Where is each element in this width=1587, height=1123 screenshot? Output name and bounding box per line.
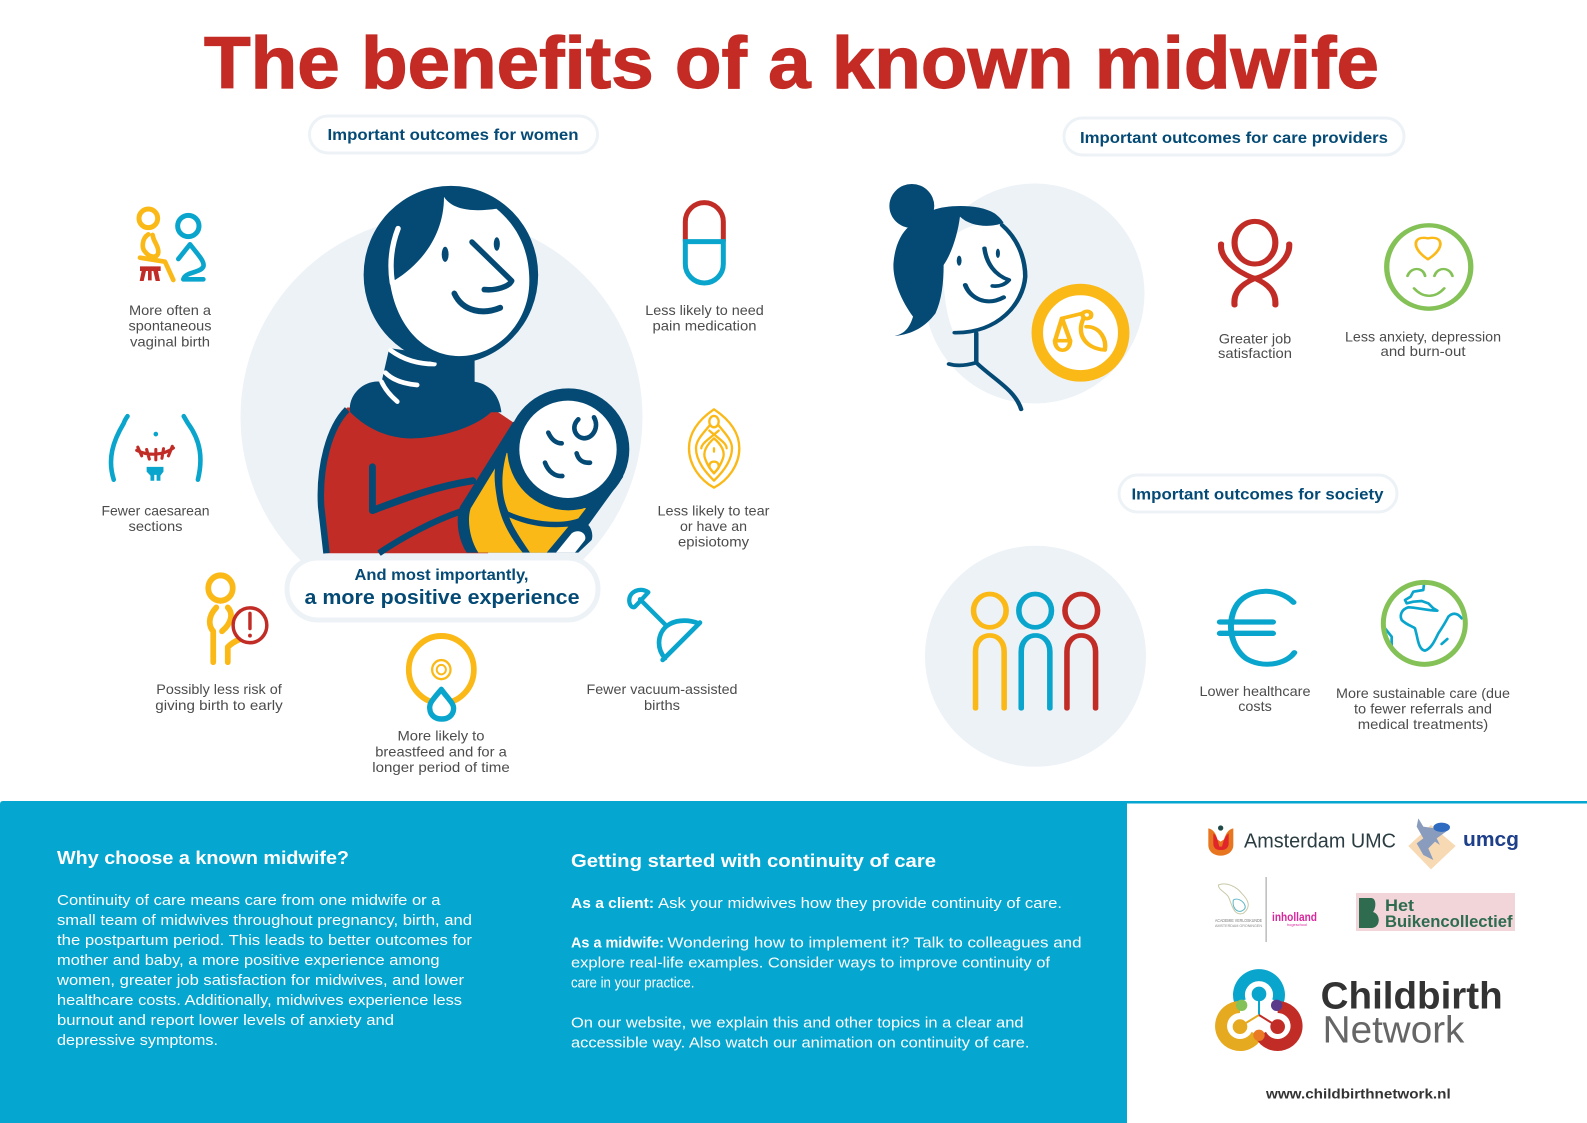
label: spontaneous vaginal birth [128, 303, 212, 350]
label: anxiety and burn-out [1345, 330, 1501, 359]
illustration: baby [458, 388, 629, 553]
label: breastfeeding: longer period of time [372, 760, 510, 775]
text block: why choose a known midwife [56, 847, 472, 1049]
logo: Childbirth Network [1221, 975, 1503, 1052]
label: spontaneous vaginal birth: More often a [129, 303, 211, 318]
panel: outcomes for society [925, 475, 1510, 767]
label: job satisfaction [1218, 332, 1292, 361]
title: The benefits of a known midwife [204, 23, 1379, 104]
callout: a more positive experience: a more positive experience [304, 587, 580, 609]
logo: Amsterdam UMC: Amsterdam UMC [1244, 830, 1396, 852]
label: job satisfaction: satisfaction [1218, 346, 1292, 361]
label: sustainable care: to fewer referrals and [1354, 702, 1492, 716]
icon: job satisfaction figure [1221, 221, 1289, 305]
label: anxiety and burn-out: and burn-out [1380, 344, 1466, 359]
icon: caesarean sections [111, 416, 200, 481]
text block: why choose a known midwife: mother and baby, a more positive experience among [57, 952, 440, 969]
label: breastfeeding: More likely to [398, 728, 484, 744]
label: healthcare costs: costs [1238, 699, 1272, 714]
text block: getting started: As a client: [571, 895, 654, 912]
label: job satisfaction: Greater job [1219, 332, 1291, 346]
background circle: society [925, 546, 1146, 767]
label: healthcare costs: Lower healthcare [1200, 684, 1310, 699]
label: vacuum-assisted birth [586, 682, 738, 713]
heading pill: women: Important outcomes for women [328, 127, 578, 144]
icon: spontaneous vaginal birth [139, 209, 204, 281]
icon: three people [974, 594, 1098, 708]
label: pain medication [645, 303, 764, 334]
logo: Childbirth Network: Network [1323, 1010, 1465, 1052]
logo: Verloskunde and Inholland: hogeschool [1287, 923, 1307, 927]
logo: Het Buikencollectief [1356, 893, 1515, 931]
text block: getting started: care in your practice. [571, 974, 694, 992]
heading pill: care providers: Important outcomes for care providers [1080, 130, 1388, 147]
label: tear or episiotomy: Less likely to tear [658, 504, 770, 518]
text block: getting started: Ask your midwives how they provide continuity of care. [658, 895, 1062, 912]
label: breastfeeding: breastfeed and for a [375, 744, 507, 760]
text block: getting started [571, 850, 1082, 1052]
text block: why choose a known midwife: Continuity of care means care from one midwife or a [57, 892, 441, 909]
label: caesarean sections: sections [128, 519, 183, 534]
label: sustainable care [1336, 686, 1510, 732]
background circle: women [240, 216, 642, 618]
logo: Het Buikencollectief: Buikencollectief [1385, 913, 1513, 931]
label: less risk of early birth: giving birth to early [155, 698, 283, 713]
illustration: mother [321, 186, 538, 553]
text block: getting started: As a midwife: [571, 934, 664, 952]
icon: tear or episiotomy [689, 409, 739, 488]
website address: www.childbirthnetwork.nl [1265, 1086, 1451, 1102]
text block: getting started: explore real-life examples. Consider ways to improve continuity of [571, 954, 1051, 972]
label: tear or episiotomy [658, 504, 770, 550]
logo: Amsterdam UMC [1208, 825, 1396, 856]
text block: getting started: On our website, we explain this and other topics in a clear and [571, 1014, 1024, 1032]
logo: Childbirth Network: Childbirth [1321, 976, 1503, 1018]
logo: Verloskunde and Inholland [1215, 877, 1317, 942]
text block: getting started: accessible way. Also watch our animation on continuity of care. [571, 1034, 1030, 1052]
icon: globe [1383, 582, 1465, 664]
label: less risk of early birth: Possibly less risk of [156, 682, 282, 697]
heading pill: women [310, 116, 598, 153]
label: vacuum-assisted birth: Fewer vacuum-assisted [586, 682, 738, 697]
label: less risk of early birth [155, 682, 283, 713]
callout: a more positive experience [287, 558, 598, 620]
label: spontaneous vaginal birth: vaginal birth [130, 334, 210, 350]
text block: getting started: Wondering how to implement it? Talk to colleagues and [668, 934, 1082, 952]
label: breastfeeding [372, 728, 510, 775]
icon: vacuum-assisted birth [629, 590, 700, 660]
label: tear or episiotomy: or have an [680, 519, 747, 534]
heading pill: society: Important outcomes for society [1132, 486, 1384, 504]
text block: why choose a known midwife: Why choose a known midwife? [57, 847, 349, 868]
text block: why choose a known midwife: healthcare costs. Additionally, midwives experience less [57, 992, 462, 1009]
label: healthcare costs [1200, 684, 1310, 714]
text block: why choose a known midwife: the postpartum period. This leads to better outcomes for [57, 932, 472, 949]
logo: UMCG: umcg [1463, 829, 1519, 851]
label: sustainable care: More sustainable care (due [1336, 686, 1510, 701]
label: spontaneous vaginal birth: spontaneous [128, 318, 212, 334]
text block: why choose a known midwife: depressive symptoms. [57, 1032, 218, 1049]
logo: Verloskunde and Inholland: AMSTERDAM GRONINGEN [1215, 923, 1262, 928]
background circle: care providers [924, 184, 1144, 404]
icon: less risk of early birth [208, 575, 267, 662]
label: caesarean sections: Fewer caesarean [102, 504, 210, 518]
text block: why choose a known midwife: small team of midwives throughout pregnancy, birth, and [57, 912, 472, 929]
panel: teal footer [0, 801, 1587, 1123]
label: vacuum-assisted birth: births [644, 698, 680, 713]
logo: Verloskunde and Inholland: ACADEMIE VERLOSKUNDE [1215, 918, 1262, 923]
label: anxiety and burn-out: Less anxiety, depression [1345, 330, 1501, 344]
icon: breastfeeding [409, 636, 474, 719]
icon: pain medication capsule [685, 203, 723, 283]
label: caesarean sections [102, 504, 210, 534]
illustration: midwife [889, 184, 1025, 409]
panel: partner logos [1208, 818, 1519, 1102]
label: tear or episiotomy: episiotomy [678, 534, 749, 550]
label: pain medication: Less likely to need [645, 303, 764, 318]
heading pill: care providers [1064, 118, 1404, 155]
panel: outcomes for care providers [889, 118, 1501, 409]
label: pain medication: pain medication [652, 318, 756, 334]
label: sustainable care: medical treatments) [1358, 717, 1488, 732]
text block: why choose a known midwife: women, greater job satisfaction for midwives, and lower [56, 972, 464, 989]
callout: a more positive experience: And most importantly, [354, 567, 528, 584]
logo: UMCG [1408, 818, 1519, 869]
icon: happy face with heart [1387, 225, 1471, 309]
text block: getting started: Getting started with continuity of care [571, 850, 936, 871]
text block: why choose a known midwife: burnout and report lower levels of anxiety and [57, 1012, 394, 1029]
icon: euro [1220, 591, 1294, 664]
logo: Verloskunde and Inholland: inholland [1272, 912, 1317, 924]
panel: outcomes for women [102, 116, 770, 775]
icon: scale and leaf badge [1037, 290, 1124, 376]
heading pill: society [1119, 475, 1397, 512]
logo: Het Buikencollectief: Het [1385, 897, 1415, 915]
